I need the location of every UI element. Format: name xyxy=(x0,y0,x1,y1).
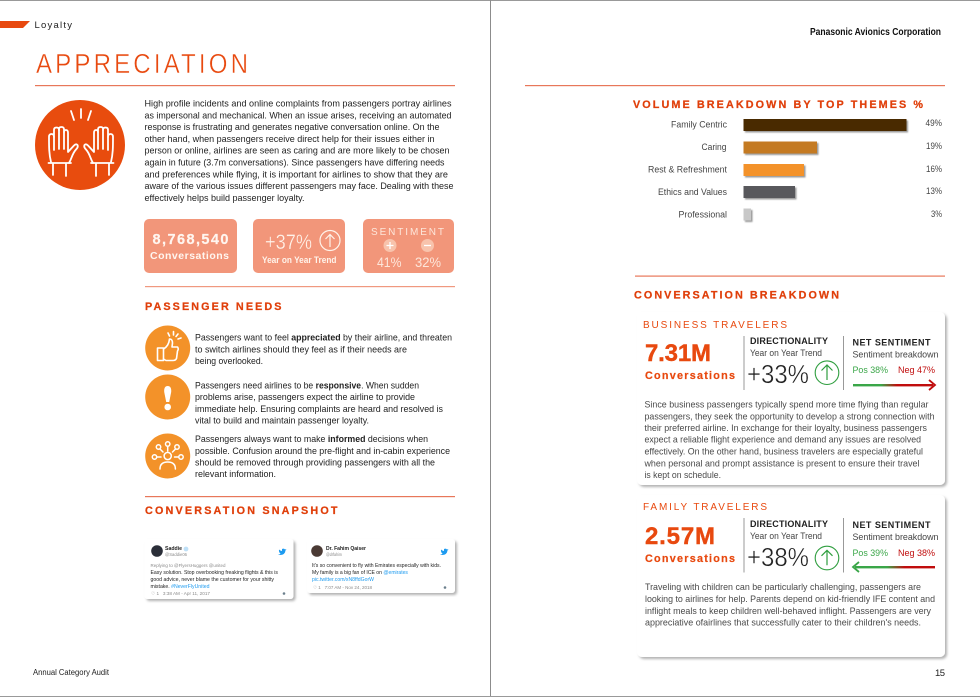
panel: business travelers: BUSINESS TRAVELERS xyxy=(643,320,787,331)
panel: family travelers: Conversations xyxy=(645,553,735,565)
panel: family travelers: DIRECTIONALITY xyxy=(750,519,828,529)
bar chart: top themes: Ethics and Values xyxy=(658,187,727,198)
panel: family travelers: inflight meals to keep children well-behaved inflight. Passengers are very xyxy=(645,605,931,616)
heading: conversation snapshot: CONVERSATION SNAPSHOT xyxy=(145,505,338,517)
stat card: year on year trend xyxy=(253,219,345,273)
stat card: conversations: 8,768,540 xyxy=(152,232,228,248)
panel: family travelers: FAMILY TRAVELERS xyxy=(643,502,767,513)
intro text: effectively helps build passenger loyalty. xyxy=(144,192,304,203)
intro text: as impersonal and mechanical. When an issue arises, receiving an automated xyxy=(144,109,452,120)
stat card: year on year trend: Year on Year Trend xyxy=(262,255,336,265)
panel: business travelers: is kept on schedule. xyxy=(644,469,721,480)
need: responsive: problems arise, passengers expect the airline to provide xyxy=(195,391,415,402)
panel: family travelers: Traveling with children can be particularly challenging, passengers are xyxy=(645,581,921,592)
tweet card: Saddie: mistake. #NeverFlyUnited xyxy=(150,584,210,590)
intro text: other hand, when passengers receive direct help for their issues either in xyxy=(144,133,434,144)
panel: business travelers: expect a reliable flight experience and demand any issues are resolved xyxy=(644,434,921,445)
bar chart: top themes xyxy=(648,118,942,220)
section tab: Loyalty: Loyalty xyxy=(34,20,72,31)
panel: business travelers: passengers, they seek the opportunity to develop a strong connection with xyxy=(644,410,934,421)
need: informed: possible. Confusion around the pre-flight and in-cabin experience xyxy=(195,445,450,456)
heading: volume breakdown: VOLUME BREAKDOWN BY TOP THEMES % xyxy=(633,99,923,111)
need: informed: should be removed through providing passengers with all the xyxy=(195,456,435,468)
intro text: and preferences while flying, it is important for airlines to show that they are xyxy=(144,168,448,179)
need: appreciated: to switch airlines should they feel as if their needs are xyxy=(195,343,407,354)
icon: exclamation mark xyxy=(145,374,190,420)
panel: business travelers: Conversations xyxy=(645,370,735,382)
intro text: aware of the various issues different passengers may face. Dealing with these xyxy=(144,180,454,191)
tweet card: Saddie: @Saddie06 xyxy=(165,552,188,557)
tweet card: Dr. Fahim Qaiser: ♡ 1 7:07 AM - Nov 24, 2018 xyxy=(313,585,373,590)
intro text: response is frustrating and generates negative conversation online. On the xyxy=(144,121,440,132)
panel: family travelers: Year on Year Trend xyxy=(750,530,822,541)
tweet card: Saddie: Replying to @FlyersHuggers @united xyxy=(150,563,226,568)
intro text xyxy=(144,98,454,203)
tweet card: Saddie: Saddie xyxy=(165,546,182,552)
intro text: again in future (3.7m conversations). Since passengers have differing needs xyxy=(144,156,445,168)
need: appreciated: being overlooked. xyxy=(195,355,263,366)
bar chart: top themes: 16% xyxy=(926,164,942,175)
bar chart: top themes: 13% xyxy=(926,186,942,197)
bar chart: top themes: 49% xyxy=(926,118,942,129)
tweet card: Saddie: Easy solution. Stop overbooking freaking flights & this is xyxy=(150,570,278,576)
tweet card: Saddie xyxy=(144,539,294,599)
panel: family travelers: 2.57M xyxy=(645,523,715,550)
intro text: person or online, airlines are seen as caring and are more likely to be chosen xyxy=(144,145,450,156)
icon: informed network xyxy=(145,434,190,478)
panel: business travelers: Neg 47% xyxy=(898,364,935,375)
bar chart: top themes: 3% xyxy=(931,209,942,220)
bar chart: top themes: Rest & Refreshment xyxy=(648,164,727,176)
panel: business travelers: when personal and prompt assistance is present to ensure their travel xyxy=(644,457,920,468)
panel: family travelers: NET SENTIMENT xyxy=(852,520,931,530)
panel: family travelers: looking to airlines for help. Parents depend on kid-friendly IFE content and xyxy=(645,593,935,604)
panel: family travelers: Neg 38% xyxy=(898,547,935,558)
stat card: sentiment: SENTIMENT xyxy=(371,227,444,238)
tweet card: Dr. Fahim Qaiser: pic.twitter.com/xN8ffdGorW xyxy=(312,577,374,583)
intro text: High profile incidents and online complaints from passengers portray airlines xyxy=(144,98,452,108)
need: responsive xyxy=(195,379,443,426)
stat card: year on year trend: +37% xyxy=(265,231,312,254)
panel: family travelers: appreciative ofairlines that successfully cater to their children's needs. xyxy=(645,617,921,628)
need: informed xyxy=(195,433,450,479)
tweet card: Dr. Fahim Qaiser: Dr. Fahim Qaiser xyxy=(326,546,366,552)
panel: business travelers: Pos 38% xyxy=(852,364,888,375)
panel: business travelers: Since business passengers typically spend more time flying than regular xyxy=(644,398,928,410)
icon: thumbs up xyxy=(145,326,190,370)
panel: business travelers: effectively. On the other hand, business travelers are especially grateful xyxy=(644,446,923,456)
need: informed: Passengers always want to make informed decisions when xyxy=(195,433,428,444)
need: informed: relevant information. xyxy=(195,468,276,479)
footer: document name: Annual Category Audit xyxy=(33,668,110,677)
panel: business travelers: Year on Year Trend xyxy=(750,347,822,358)
panel: family travelers: +38% xyxy=(747,542,809,572)
section tab: Loyalty xyxy=(0,20,72,31)
panel: family travelers: Pos 39% xyxy=(852,547,888,558)
need: appreciated xyxy=(195,332,452,366)
tweet card: Saddie: ♡ 1 3:38 AM - Apr 11, 2017 xyxy=(151,591,211,596)
bar chart: top themes: 19% xyxy=(926,141,942,152)
footer: page number: 15 xyxy=(935,668,945,679)
panel: business travelers: NET SENTIMENT xyxy=(852,338,931,348)
panel: business travelers xyxy=(637,312,945,485)
panel: business travelers: DIRECTIONALITY xyxy=(750,336,828,346)
tweet card: Dr. Fahim Qaiser: It's so convenient to fly with Emirates especially with kids. xyxy=(312,563,441,569)
bar chart: top themes: Professional xyxy=(678,210,727,220)
stat card: sentiment: 41% xyxy=(377,255,402,270)
heading: passenger needs: PASSENGER NEEDS xyxy=(145,301,282,313)
panel: family travelers xyxy=(637,495,945,657)
need: responsive: immediate help. Ensuring complaints are heard and resolved is xyxy=(195,403,443,414)
header: company name: Panasonic Avionics Corporation xyxy=(810,27,941,38)
tweet card: Saddie: good advice, never blame the customer for your shitty xyxy=(150,577,274,583)
need: responsive: Passengers need airlines to be responsive. When sudden xyxy=(195,379,419,390)
need: appreciated: Passengers want to feel appreciated by their airline, and threaten xyxy=(195,332,452,342)
tweet card: Dr. Fahim Qaiser: @drfahim xyxy=(326,552,342,557)
stat card: conversations: Conversations xyxy=(150,250,229,262)
panel: business travelers: 7.31M xyxy=(645,340,711,367)
bar chart: top themes: Caring xyxy=(702,142,726,153)
panel: family travelers: Sentiment breakdown xyxy=(852,531,938,542)
stat card: sentiment xyxy=(363,219,454,273)
bar chart: top themes: Family Centric xyxy=(671,120,727,130)
panel: business travelers: Sentiment breakdown xyxy=(852,348,938,360)
title: APPRECIATION xyxy=(36,47,248,79)
stat card: sentiment: 32% xyxy=(415,255,441,270)
panel: business travelers: their preferred airline. In exchange for their loyalty, business passengers xyxy=(644,422,927,433)
tweet card: Dr. Fahim Qaiser xyxy=(307,539,455,593)
tweet card: Dr. Fahim Qaiser: My family is a big fan of ICE on @emirates xyxy=(312,570,408,576)
stat card: conversations xyxy=(144,219,237,273)
panel: business travelers: +33% xyxy=(747,359,809,389)
heading: conversation breakdown: CONVERSATION BREAKDOWN xyxy=(634,290,839,302)
need: responsive: vital to build and maintain passenger loyalty. xyxy=(195,415,369,426)
icon: raised hands xyxy=(35,100,125,190)
